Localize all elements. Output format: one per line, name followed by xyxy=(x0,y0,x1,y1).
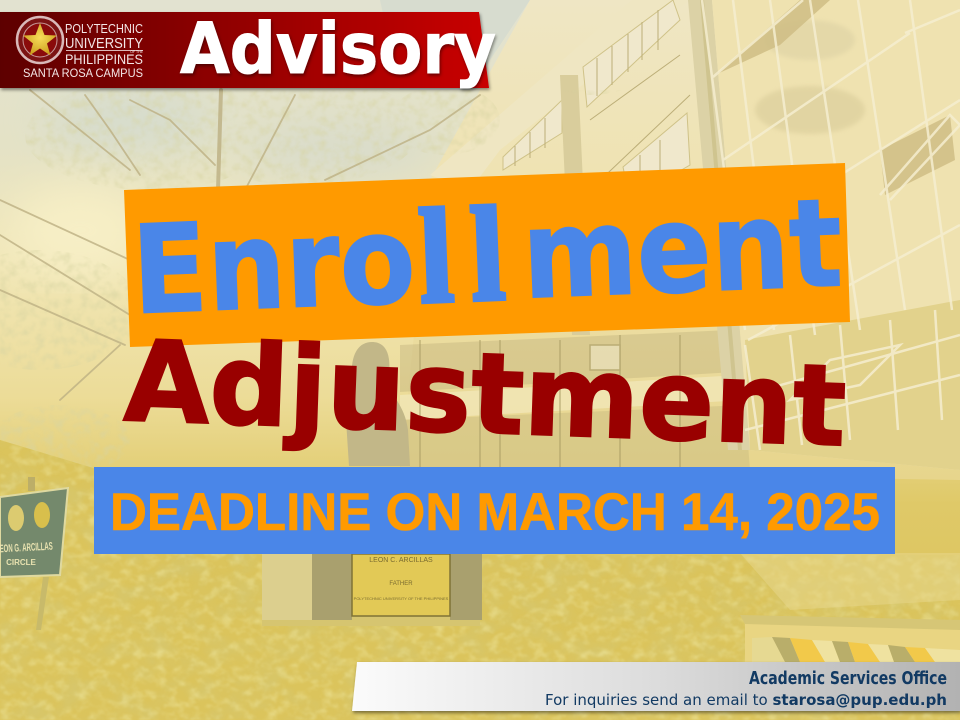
sky and cloud patches xyxy=(10,90,440,275)
university name: POLYTECHNIC xyxy=(65,22,143,36)
road and curb xyxy=(745,622,960,662)
lower facade bands xyxy=(400,330,735,392)
university name: PHILIPPINES xyxy=(65,51,143,67)
university name: OF THE xyxy=(130,50,144,54)
roadside circle sign xyxy=(0,477,68,630)
foliage foreground xyxy=(0,440,960,720)
tree canopy texture xyxy=(0,90,604,467)
university name xyxy=(23,22,144,80)
university name: SANTA ROSA CAMPUS xyxy=(23,66,143,80)
ribbon shape xyxy=(0,12,489,88)
building facade xyxy=(400,0,960,480)
monument plaque xyxy=(262,554,482,626)
banner: deadline: DEADLINE ON MARCH 14, 2025 xyxy=(110,483,880,542)
header ribbon xyxy=(0,8,496,90)
monument plaque: POLYTECHNIC UNIVERSITY OF THE PHILIPPINES xyxy=(354,596,449,601)
glass curtain wall xyxy=(702,0,960,470)
heading: Adjustment: Adjustment xyxy=(122,317,848,472)
bust statue xyxy=(346,342,410,466)
banner: deadline xyxy=(94,467,895,554)
footer shape xyxy=(352,662,960,711)
striped road barrier xyxy=(752,637,960,662)
banner: Enrollment: Enrollment xyxy=(129,166,845,342)
drain pipe xyxy=(560,75,590,335)
university name: UNIVERSITY xyxy=(65,35,143,52)
structural pillar xyxy=(688,0,750,450)
title: Advisory: Advisory xyxy=(180,8,496,90)
monument plaque: LEON C. ARCILLAS xyxy=(369,557,433,564)
upper window rows xyxy=(583,0,680,107)
inquiry line: For inquiries send an email to starosa@pup.edu.ph xyxy=(545,691,947,709)
back wall behind hedge xyxy=(740,553,960,610)
roadside circle sign: CIRCLE xyxy=(6,558,37,567)
monument plaque: FATHER xyxy=(389,581,413,587)
tree branches xyxy=(0,90,480,400)
icon: university seal xyxy=(17,17,63,63)
footer contact bar xyxy=(352,662,960,711)
